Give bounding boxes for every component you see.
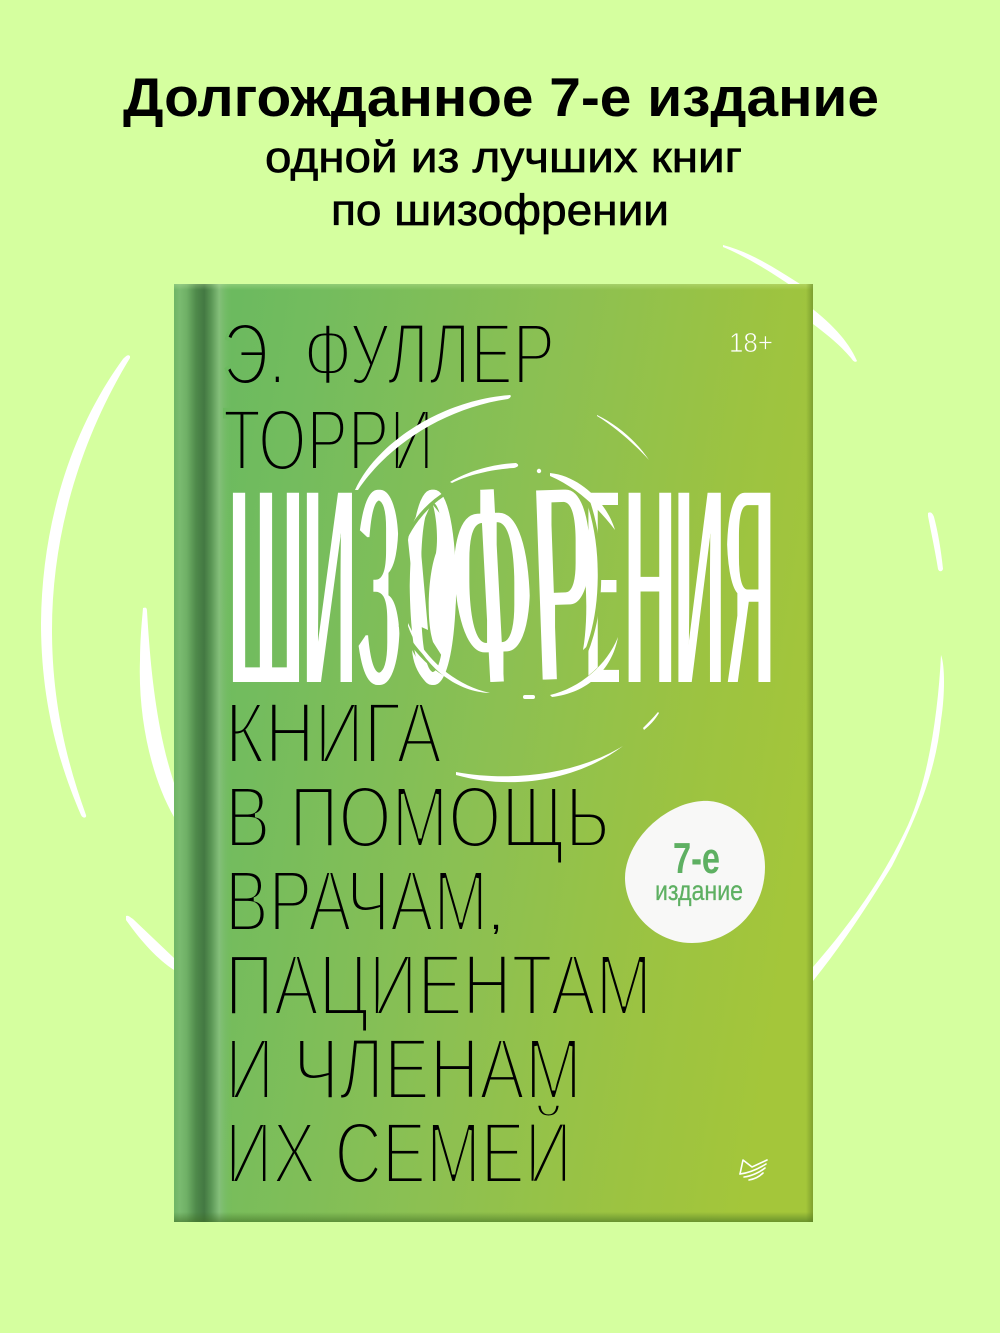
book title: Р: [528, 412, 600, 757]
lens ring cutting the title: [398, 474, 618, 695]
author and subtitle thin text: ИХ СЕМЕЙ: [225, 1104, 572, 1202]
book title: Ф: [443, 412, 541, 759]
edition badge: 7-е: [673, 834, 720, 883]
author and subtitle thin text: [223, 306, 652, 1202]
lens arcs: [355, 395, 659, 782]
author and subtitle thin text: КНИГА: [225, 685, 442, 782]
author and subtitle thin text: ПАЦИЕНТАМ: [225, 937, 652, 1034]
title: Долгожданное 7-е издание: [123, 66, 879, 128]
edition badge: издание: [655, 875, 743, 906]
book spine: [174, 284, 232, 1222]
book title: О: [408, 416, 458, 759]
book cover: [174, 284, 813, 1222]
warped lens bands over the title: [408, 493, 601, 680]
age rating: 18+: [729, 327, 773, 358]
subtitle: [265, 133, 742, 235]
publisher logo: [740, 1160, 767, 1180]
author and subtitle thin text: ВРАЧАМ: [225, 853, 488, 950]
author and subtitle thin text: ТОРРИ: [223, 392, 434, 489]
subtitle: одной из лучших книг: [265, 133, 742, 182]
comma: ,: [490, 894, 502, 938]
author and subtitle thin text: Э. ФУЛЛЕР: [223, 306, 555, 403]
edition badge: [625, 801, 765, 943]
author and subtitle thin text: В ПОМОЩЬ: [225, 769, 610, 866]
background swooshes: [41, 245, 944, 981]
book title: Е: [586, 416, 620, 759]
author and subtitle thin text: И ЧЛЕНАМ: [225, 1021, 582, 1118]
book title: ШИЗ: [229, 416, 402, 759]
subtitle: по шизофрении: [331, 186, 669, 235]
